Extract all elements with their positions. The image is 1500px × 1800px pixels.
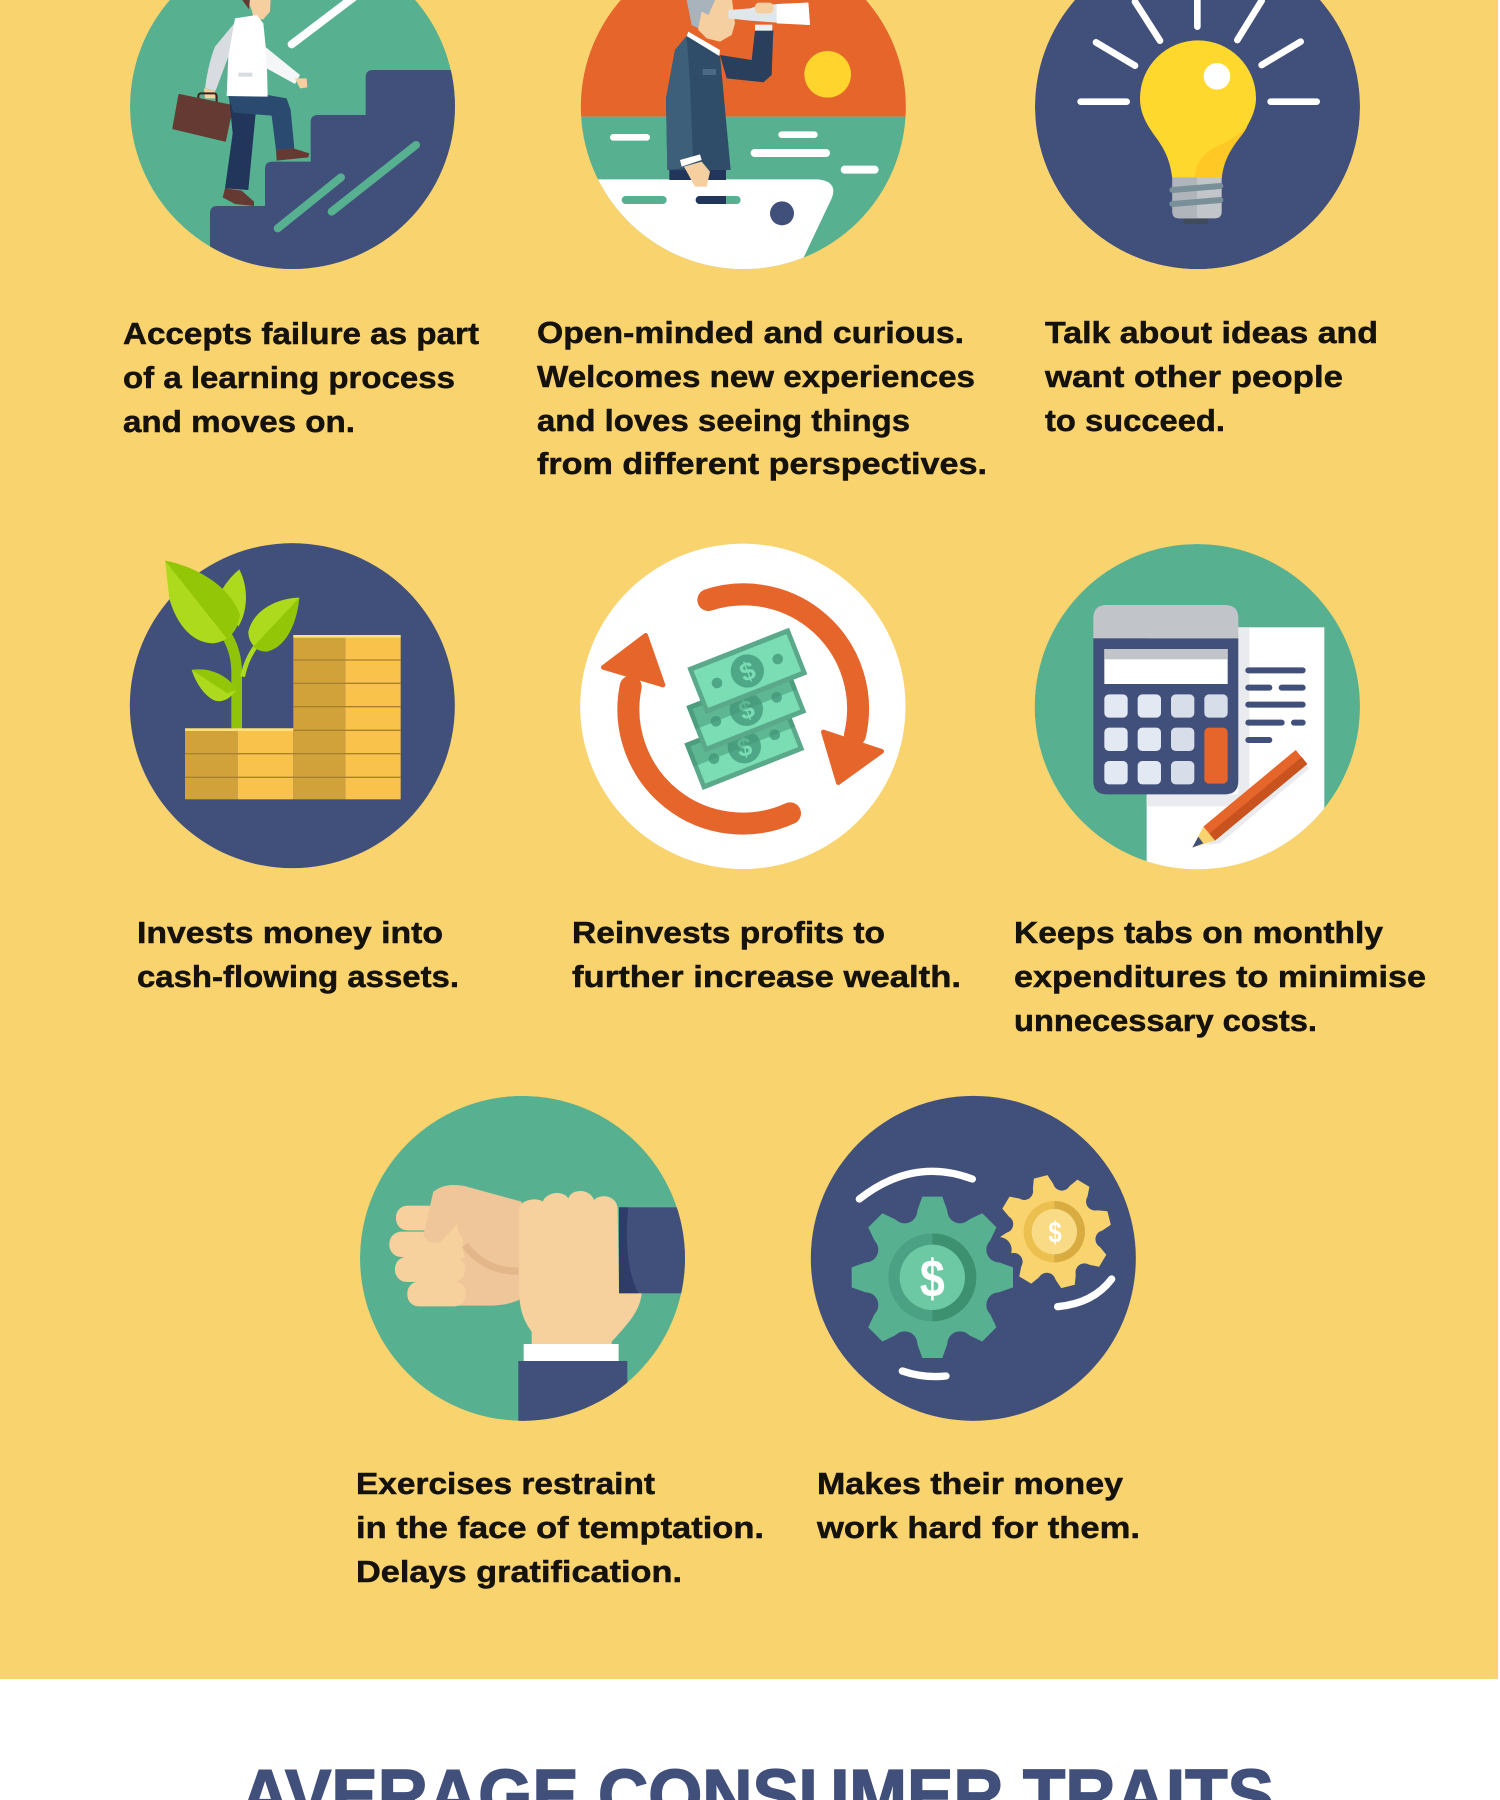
caption: money works hard: Makes their money <box>817 1466 1124 1501</box>
caption: accepts failure: of a learning process <box>123 360 455 395</box>
caption: exercises restraint: Exercises restraint <box>356 1466 655 1501</box>
panel: keeps tabs <box>1014 544 1426 1038</box>
caption: open-minded: Open-minded and curious. <box>537 315 964 350</box>
bottom banknote <box>684 703 804 790</box>
caption: keeps tabs: unnecessary costs. <box>1014 1003 1317 1038</box>
icon: plant and coin stacks <box>130 543 455 868</box>
middle banknote <box>686 666 806 753</box>
caption: accepts failure: and moves on. <box>123 404 355 439</box>
caption: accepts failure: Accepts failure as part <box>123 316 479 351</box>
caption: talks about ideas: to succeed. <box>1045 403 1225 438</box>
caption: exercises restraint <box>356 1466 764 1589</box>
panel: open-minded <box>537 0 987 481</box>
icon: man with telescope on boat <box>580 0 906 270</box>
caption: talks about ideas: want other people <box>1044 359 1343 394</box>
top banknote <box>687 628 807 714</box>
caption: money works hard <box>816 1466 1140 1545</box>
caption: exercises restraint: in the face of temptation. <box>356 1510 764 1545</box>
icon: money gears <box>811 1096 1136 1421</box>
caption: accepts failure <box>123 316 479 439</box>
caption: open-minded: from different perspectives. <box>537 446 987 481</box>
caption: reinvests profits: Reinvests profits to <box>572 915 885 950</box>
panel: reinvests profits <box>572 544 961 994</box>
large green gear <box>852 1197 1013 1358</box>
caption: talks about ideas: Talk about ideas and <box>1045 315 1378 350</box>
caption: reinvests profits: further increase wealth. <box>572 959 961 994</box>
panel: money works hard <box>811 1096 1140 1545</box>
icon: light bulb <box>1035 0 1360 269</box>
icon: money cycle arrows <box>580 544 905 869</box>
panel: invests money <box>130 543 459 994</box>
caption: keeps tabs: expenditures to minimise <box>1014 959 1426 994</box>
caption: reinvests profits <box>572 915 961 994</box>
caption: invests money: cash-flowing assets. <box>137 959 459 994</box>
middle banknote: $ <box>734 693 759 726</box>
caption: money works hard: work hard for them. <box>816 1510 1140 1545</box>
caption: invests money <box>137 915 459 994</box>
caption: open-minded <box>537 315 987 481</box>
icon: money gears: $ <box>1048 1215 1062 1249</box>
panel: talks about ideas <box>1035 0 1378 438</box>
caption: keeps tabs: Keeps tabs on monthly <box>1014 915 1384 950</box>
caption: talks about ideas <box>1044 315 1378 438</box>
caption: invests money: Invests money into <box>137 915 443 950</box>
panel: accepts failure <box>123 0 479 439</box>
caption: exercises restraint: Delays gratification. <box>356 1554 682 1589</box>
bottom banknote: $ <box>734 731 755 763</box>
panel: exercises restraint <box>356 1096 764 1589</box>
caption: keeps tabs <box>1014 915 1426 1038</box>
icon: calculator and paper <box>1035 544 1360 881</box>
top banknote: $ <box>735 655 760 688</box>
large green gear: $ <box>920 1250 945 1309</box>
small yellow gear <box>986 1163 1123 1300</box>
caption: open-minded: and loves seeing things <box>537 403 910 438</box>
icon: businessman climbing stairs <box>130 0 455 269</box>
icon: hand holding wrist <box>360 1096 689 1428</box>
caption: open-minded: Welcomes new experiences <box>537 359 975 394</box>
